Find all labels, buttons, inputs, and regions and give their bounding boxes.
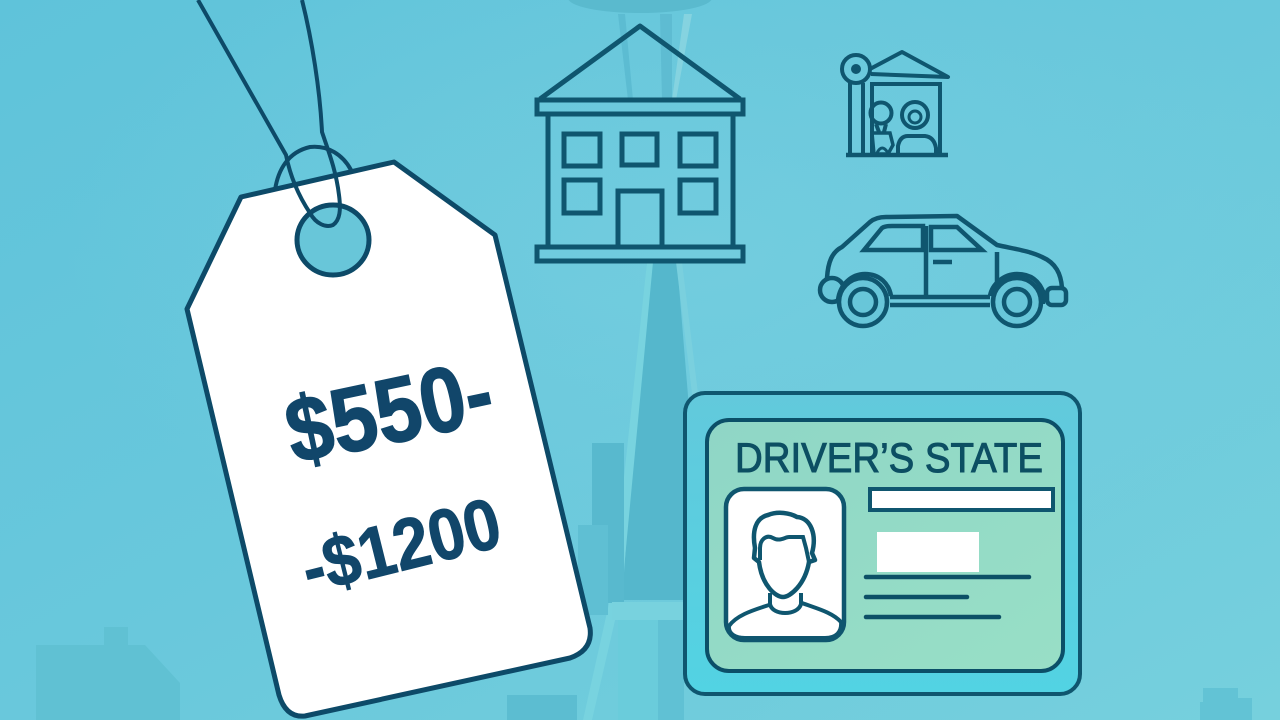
icon: car (820, 216, 1066, 326)
price lower line: -$1200 (294, 483, 509, 610)
card outer frame (685, 393, 1080, 694)
string (198, 0, 340, 226)
tag hole (297, 205, 369, 275)
price upper line: $550- (277, 341, 502, 484)
license card (685, 393, 1080, 694)
white field (877, 532, 979, 572)
card title: DRIVER’S STATE (735, 434, 1043, 481)
icon: booth with two people (842, 52, 948, 155)
portrait photo (726, 489, 844, 640)
name bar (870, 489, 1053, 510)
icon: price tag with string (187, 0, 590, 716)
price text (277, 341, 509, 610)
detail lines (866, 577, 1029, 617)
tag body (187, 162, 590, 716)
tag loop behind the tag (275, 147, 351, 190)
icon: building (537, 26, 743, 261)
card inner panel (707, 420, 1063, 671)
